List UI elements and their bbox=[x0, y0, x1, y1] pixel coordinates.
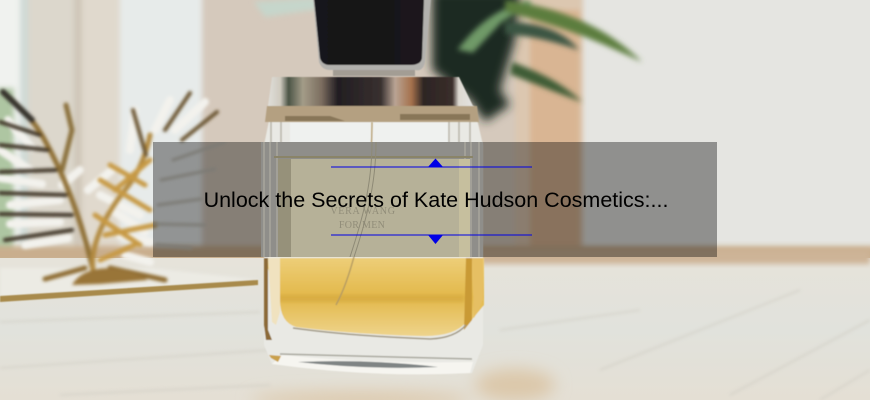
wall bbox=[0, 0, 870, 270]
perfume liquid bbox=[264, 258, 484, 336]
banner artwork: bottle label, fronds and decorative blue lines: FOR MEN bbox=[339, 220, 385, 231]
label text: VERA WANG bbox=[330, 206, 396, 217]
table edge band bbox=[0, 246, 870, 262]
gold palm ornament bbox=[0, 92, 260, 302]
table bbox=[0, 258, 870, 400]
white mirror tray bbox=[0, 268, 260, 298]
banner artwork: bottle label, fronds and decorative blue lines bbox=[153, 142, 532, 257]
bottle glass body bbox=[264, 106, 484, 374]
silver neck ring bbox=[333, 66, 415, 76]
pale gaps between fronds bbox=[0, 100, 205, 262]
title banner bbox=[153, 142, 717, 257]
bottom blue line and down arrow bbox=[331, 234, 532, 244]
black cap bbox=[313, 0, 431, 70]
title text: Unlock the Secrets of Kate Hudson Cosmetics:... bbox=[204, 188, 668, 212]
plant bbox=[254, 0, 642, 122]
gold tray edge bbox=[0, 280, 258, 302]
glass walls seen through banner bbox=[261, 142, 483, 257]
window and curtains at left bbox=[0, 0, 583, 280]
gold palm fronds bbox=[0, 92, 217, 285]
top blue line and up arrow bbox=[331, 158, 532, 168]
perfume bottle bbox=[264, 0, 484, 374]
bottle shoulder collar bbox=[265, 77, 479, 122]
bottle label bbox=[278, 159, 470, 257]
